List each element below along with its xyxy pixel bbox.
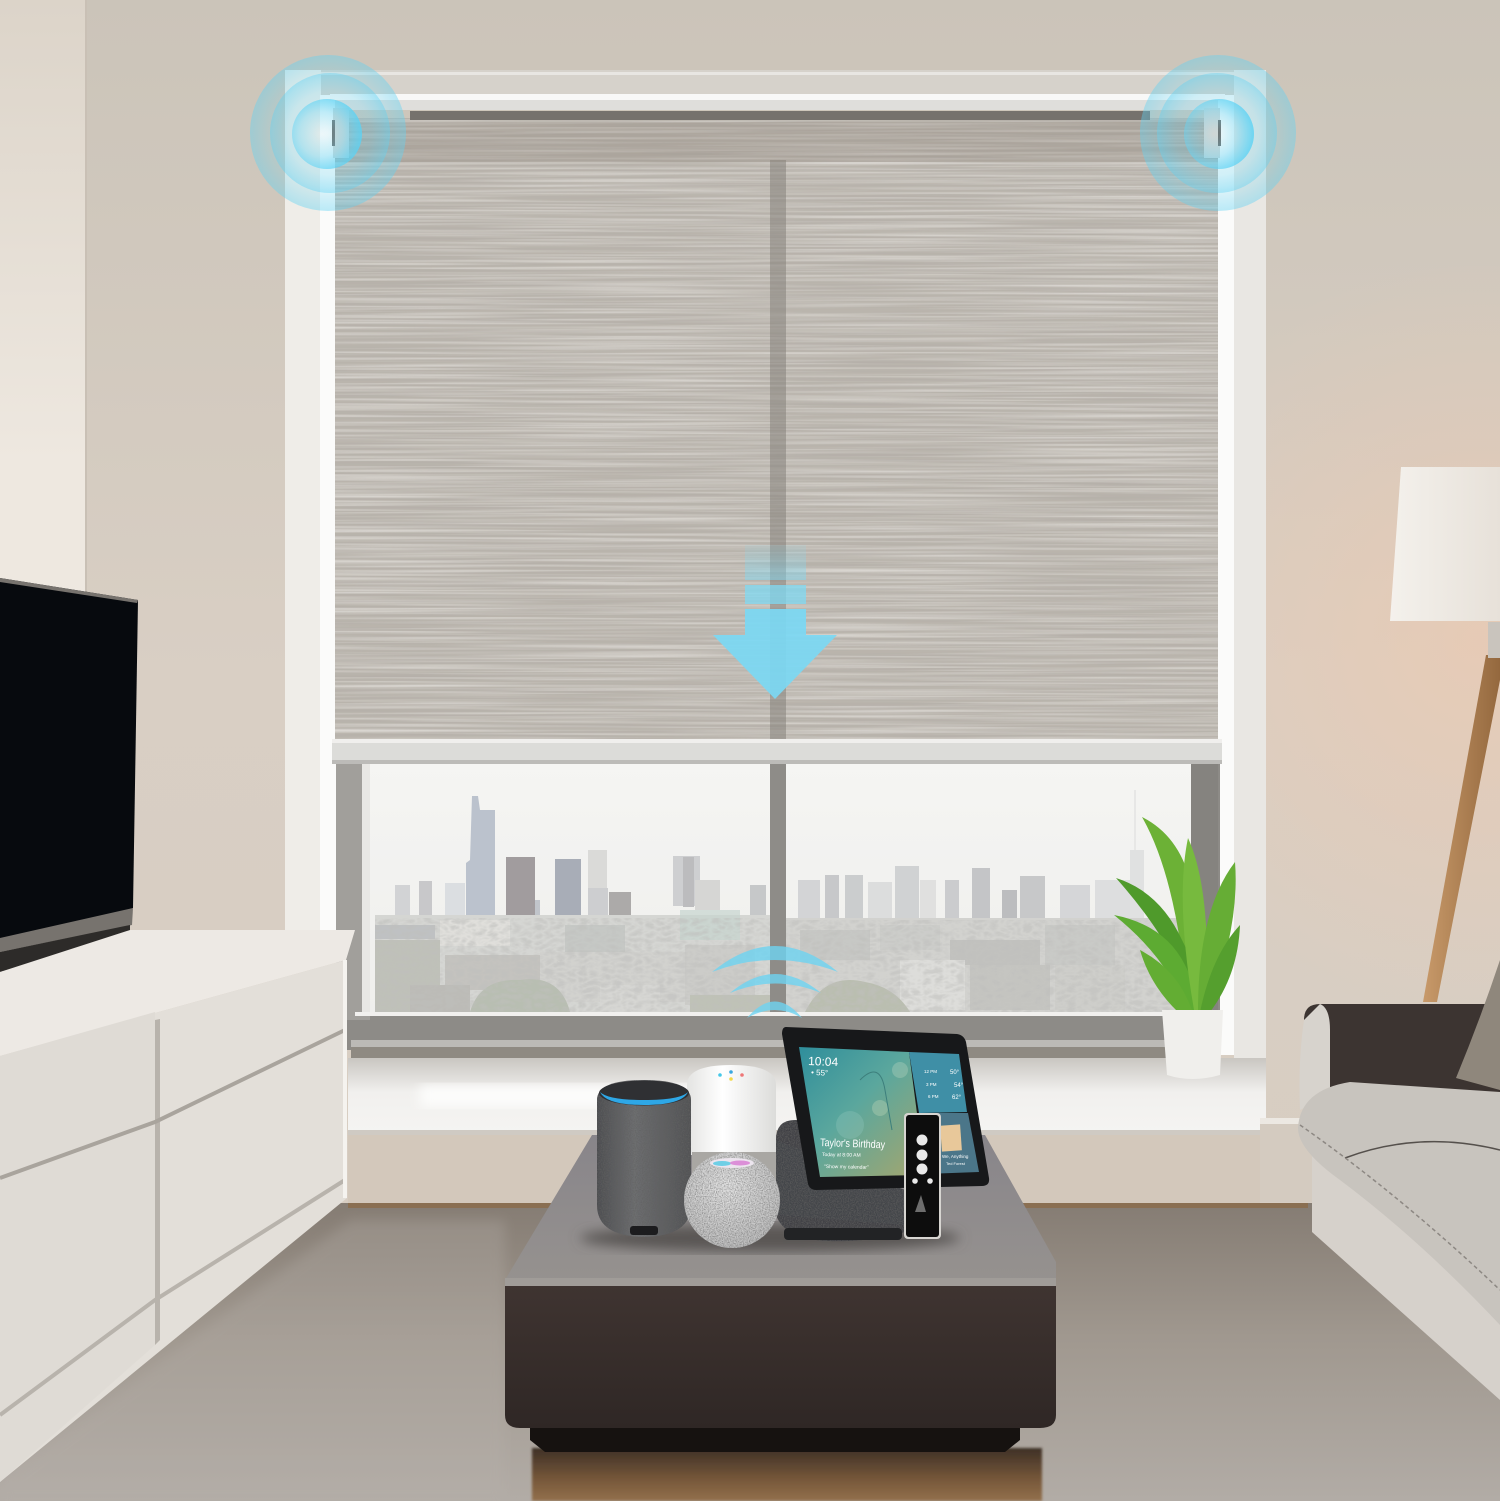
tablet text: "Show my calendar" bbox=[824, 1164, 869, 1171]
plant leaves bbox=[1114, 817, 1240, 1012]
sofa pillow bbox=[1456, 960, 1500, 1090]
tablet text: 6 PM bbox=[928, 1094, 939, 1099]
tablet text: 62° bbox=[952, 1095, 962, 1101]
roller shade bbox=[332, 100, 1222, 764]
device: google home speaker bbox=[687, 1065, 776, 1182]
sofa bbox=[1298, 960, 1500, 1400]
tablet text: We, Anything bbox=[942, 1154, 969, 1159]
tablet text: 3 PM bbox=[926, 1082, 937, 1087]
device: remote control bbox=[904, 1113, 941, 1239]
bottom rail bbox=[332, 739, 1222, 764]
ottoman table bbox=[505, 1135, 1056, 1452]
window trim bbox=[285, 70, 1266, 1120]
tv cabinet bbox=[0, 578, 355, 1482]
tablet text: 10:04 bbox=[808, 1054, 839, 1069]
tablet text: Ted Forest bbox=[946, 1161, 966, 1166]
arrow: shade moving down bbox=[713, 545, 837, 699]
cabinet front bbox=[0, 960, 347, 1482]
icon: left motor signal pulses bbox=[250, 55, 406, 211]
skyline left pane bbox=[375, 796, 770, 1015]
plant bbox=[1114, 817, 1240, 1079]
device: echo show speaker base bbox=[776, 1120, 905, 1241]
tablet text: • 55° bbox=[811, 1068, 828, 1078]
shade fabric bbox=[335, 118, 1218, 740]
tablet text bbox=[808, 1054, 969, 1171]
tablet text: Today at 8:00 AM bbox=[822, 1152, 861, 1159]
icon: right motor signal pulses bbox=[1140, 55, 1296, 211]
lamp bbox=[1390, 467, 1500, 1002]
floor bbox=[0, 1203, 1500, 1501]
tablet text: 50° bbox=[950, 1070, 960, 1076]
tablet text: Taylor's Birthday bbox=[820, 1137, 886, 1151]
tablet text: 54° bbox=[954, 1083, 964, 1089]
device: echo show tablet bbox=[782, 1027, 989, 1190]
smart devices group bbox=[597, 1027, 989, 1248]
device: homepod mini speaker bbox=[684, 1152, 780, 1248]
tablet text: 12 PM bbox=[924, 1069, 937, 1074]
headrail bbox=[332, 100, 1221, 158]
tablet screen bbox=[799, 1047, 979, 1177]
cabinet top bbox=[0, 930, 355, 1056]
tv bbox=[0, 578, 138, 972]
window sill bbox=[348, 1058, 1312, 1203]
window glass and city skyline bbox=[336, 760, 1220, 1058]
device: amazon echo speaker bbox=[597, 1080, 691, 1237]
plant pot bbox=[1162, 1010, 1223, 1079]
icon: wireless signal arcs bbox=[712, 946, 838, 1018]
skyline right pane bbox=[786, 790, 1191, 1014]
